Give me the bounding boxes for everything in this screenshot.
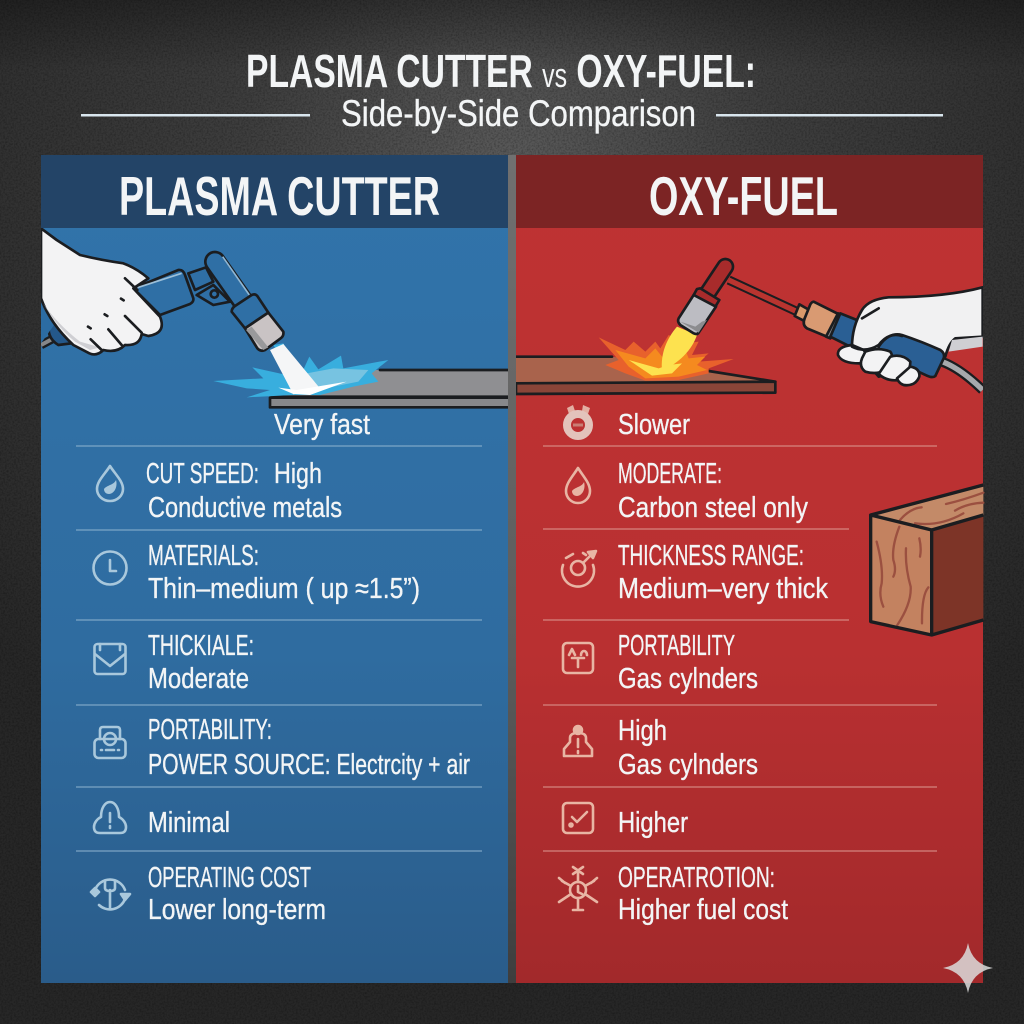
row: portability: PORTABILITY [618, 630, 735, 662]
row: materials: Carbon steel only [618, 492, 808, 524]
header: oxy-fuel [516, 155, 983, 228]
row: materials: MATERIALS: [148, 540, 259, 572]
illustration: oxy-fuel torch heating metal plate [516, 267, 983, 394]
icon: water drop [97, 466, 123, 501]
row: thickness: Moderate [148, 663, 249, 695]
icon: warning bell [564, 726, 592, 756]
title: PLASMA CUTTER vs OXY-FUEL: [246, 45, 756, 97]
illustration: plasma torch cutting metal plate [41, 228, 510, 407]
icon: snowflake gauge [559, 867, 597, 910]
icon: water drop [566, 468, 590, 503]
row: operating cost: OPERATING COST [148, 862, 311, 894]
icon: alarm clock [567, 405, 590, 436]
icon: sparkle [943, 943, 993, 993]
header: plasma cutter [41, 155, 508, 228]
panel: plasma cutter [41, 155, 510, 983]
illustration: wood block [871, 485, 983, 635]
row: cut speed: Conductive metals [148, 492, 342, 524]
row: safety [543, 715, 937, 787]
row: safety: High [618, 715, 667, 747]
title [81, 45, 943, 134]
row: thickness range [543, 540, 849, 620]
row: portability [543, 630, 937, 705]
icon: warning bell [94, 802, 126, 833]
icon: wrench with arrows [91, 880, 130, 909]
row: operating cost: Lower long-term [148, 894, 326, 926]
row: cut speed: Very fast [274, 409, 370, 441]
row: cut speed [76, 409, 482, 530]
row: operating cost [91, 862, 326, 926]
title: Side-by-Side Comparison [341, 93, 696, 134]
row: operating cost: OPERATROTION: [618, 862, 775, 894]
row: cut speed: High [274, 458, 322, 490]
row: cut speed [543, 405, 937, 446]
icon: device [94, 727, 126, 758]
icon: gauge [562, 551, 596, 587]
row: safety: Minimal [148, 807, 230, 839]
header: plasma cutter: PLASMA CUTTER [119, 165, 440, 227]
row: thickness: THICKIALE: [148, 630, 254, 662]
row: materials [543, 458, 849, 529]
row: cut speed: CUT SPEED: [146, 458, 259, 490]
panel: oxy-fuel [516, 155, 983, 983]
row: safety: Gas cylnders [618, 749, 758, 781]
icon: gas valves box [563, 643, 593, 673]
row: safety [76, 802, 482, 851]
row: materials [76, 540, 482, 620]
row: thickness [76, 630, 482, 705]
row: operating cost [559, 862, 788, 926]
row: thickness range: THICKNESS RANGE: [618, 540, 804, 572]
row: portability: PORTABILITY: [148, 714, 272, 746]
row: portability [76, 714, 482, 787]
row: materials: MODERATE: [618, 458, 722, 490]
row: portability: POWER SOURCE: Electrcity + air [148, 749, 470, 781]
row: operating cost: Higher fuel cost [618, 894, 788, 926]
header: oxy-fuel: OXY-FUEL [649, 165, 838, 227]
row: portability: Gas cylnders [618, 663, 758, 695]
row: materials: Thin–medium ( up ≈1.5”) [148, 573, 420, 605]
row: maintenance: Higher [618, 807, 688, 839]
icon: envelope [94, 644, 126, 674]
icon: clock [94, 552, 126, 584]
row: thickness range: Medium–very thick [618, 573, 828, 605]
row: maintenance [543, 803, 937, 851]
icon: check box [563, 803, 593, 833]
row: cut speed: Slower [618, 409, 690, 441]
